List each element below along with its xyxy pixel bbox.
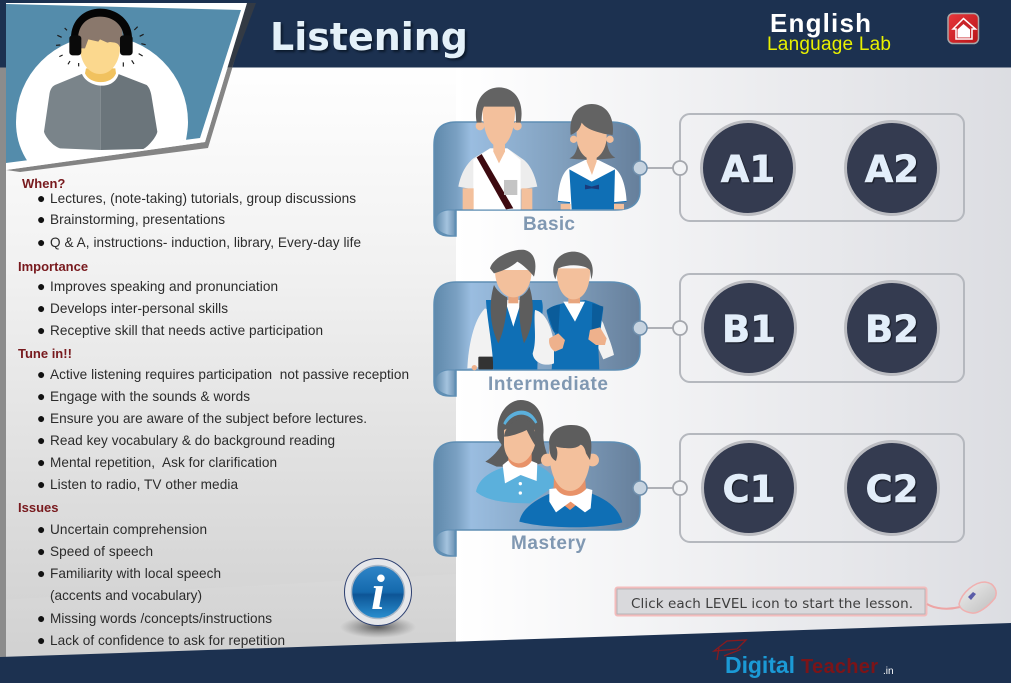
- Tune in section: Ensure you are aware of the subject before lectures.: [50, 411, 367, 426]
- connector node right: [673, 321, 687, 335]
- When section: Lectures, (note-taking) tutorials, group discussions: [50, 191, 356, 206]
- panel: Intermediate level: [434, 250, 964, 396]
- Tune in section: ●: [37, 454, 45, 470]
- Tune in section: ●: [37, 410, 45, 426]
- Tune in section: Mental repetition, Ask for clarification: [50, 455, 277, 470]
- Issues section: (accents and vocabulary): [50, 588, 202, 603]
- Tune in section: ●: [37, 476, 45, 492]
- title: Listening: [270, 15, 468, 59]
- Importance section: Improves speaking and pronunciation: [50, 279, 278, 294]
- icon: graduation cap: [714, 640, 746, 660]
- left edge strip: [0, 0, 6, 660]
- button: C2: [846, 442, 938, 534]
- When section: Q & A, instructions- induction, library, Every-day life: [50, 235, 361, 250]
- button: B1: B1: [722, 308, 776, 351]
- Issues section: Uncertain comprehension: [50, 522, 207, 537]
- label: Intermediate: Intermediate: [488, 374, 608, 395]
- figure: girl student: [558, 104, 627, 209]
- connector node right: [673, 481, 687, 495]
- options box: [680, 114, 964, 221]
- connector node right: [673, 161, 687, 175]
- button: B2: [846, 282, 938, 374]
- Issues section: Familiarity with local speech: [50, 566, 221, 581]
- figure: girl with vest: [467, 250, 543, 370]
- connector node left: [633, 321, 647, 335]
- When section: Brainstorming, presentations: [50, 212, 225, 227]
- icon: info button: i: [371, 564, 385, 620]
- When section: ●: [37, 211, 45, 227]
- listener figure: [44, 9, 157, 150]
- connector node left: [633, 161, 647, 175]
- Importance section: ●: [37, 278, 45, 294]
- button: A2: [846, 122, 938, 214]
- Issues section: ●: [37, 632, 45, 648]
- When section: [22, 176, 361, 250]
- Tune in section: Read key vocabulary & do background reading: [50, 433, 335, 448]
- figure: woman: [476, 400, 558, 503]
- figure: man: [519, 425, 622, 527]
- icon: home button: [948, 14, 978, 44]
- button: C2: C2: [866, 468, 918, 511]
- button: C1: [702, 442, 796, 534]
- figure: boy student: [458, 87, 537, 209]
- icon: mouse with cable: [927, 582, 996, 613]
- photo panel: listener: [6, 3, 247, 170]
- Issues section: ●: [37, 521, 45, 537]
- button: C1: C1: [723, 468, 775, 511]
- heading: Tune in: Tune in!!: [18, 346, 72, 361]
- Importance section: Receptive skill that needs active participation: [50, 323, 323, 338]
- panel: Basic level: [434, 87, 964, 236]
- figure: boy with vest: [547, 252, 614, 369]
- white circle: [16, 36, 188, 162]
- right area background: [456, 60, 1011, 660]
- footer bar: [0, 623, 1011, 683]
- Importance section: Develops inter-personal skills: [50, 301, 228, 316]
- brand: English Language Lab: English: [770, 8, 871, 38]
- options box: [680, 434, 964, 542]
- Issues section: Missing words /concepts/instructions: [50, 611, 272, 626]
- Importance section: [18, 259, 323, 338]
- Tune in section: Active listening requires participation not passive reception: [50, 367, 409, 382]
- button: A1: A1: [721, 148, 775, 191]
- banner: [434, 282, 640, 396]
- Tune in section: [18, 346, 409, 492]
- logo: Digital Teacher: [714, 640, 894, 678]
- banner curl: [435, 370, 455, 396]
- header bar: [0, 0, 1011, 68]
- Issues section: ●: [37, 610, 45, 626]
- left panel diagonal sheen: [0, 574, 456, 660]
- Issues section: ●: [37, 543, 45, 559]
- Tune in section: ●: [37, 432, 45, 448]
- callout: click instruction: Click each LEVEL icon to start the lesson.: [631, 596, 913, 612]
- Tune in section: ●: [37, 388, 45, 404]
- figure: girl's sleeve and hand: [533, 310, 565, 365]
- button: B1: [702, 282, 796, 374]
- dark shadow over header: [227, 3, 256, 67]
- logo: Digital Teacher: .in: [883, 666, 894, 677]
- callout: click instruction: [616, 588, 926, 616]
- panel: Mastery level: [434, 400, 964, 556]
- button: A1: [702, 122, 794, 214]
- banner curl: [435, 210, 455, 236]
- banner: [434, 442, 640, 556]
- Importance section: ●: [37, 300, 45, 316]
- Issues section: Lack of confidence to ask for repetition: [50, 633, 285, 648]
- label: Mastery: Mastery: [511, 533, 586, 554]
- icon: info button: [340, 558, 416, 638]
- logo: Digital Teacher: Teacher: [801, 656, 878, 678]
- options box: [680, 274, 964, 382]
- heading: When: When?: [22, 176, 65, 191]
- button: A2: A2: [865, 148, 919, 191]
- heading: Issues: Issues: [18, 500, 58, 515]
- Issues section: Speed of speech: [50, 544, 153, 559]
- When section: ●: [37, 234, 45, 250]
- connector: [647, 167, 673, 169]
- logo: Digital Teacher: Digital: [725, 652, 795, 678]
- heading: Importance: Importance: [18, 259, 88, 274]
- banner curl: [435, 530, 455, 556]
- Issues section: ●: [37, 565, 45, 581]
- connector node left: [633, 481, 647, 495]
- left text panel background: [0, 60, 456, 660]
- Tune in section: Engage with the sounds & words: [50, 389, 250, 404]
- shadow of photo panel: [6, 3, 252, 172]
- Issues section: [18, 500, 285, 648]
- When section: ●: [37, 190, 45, 206]
- brand: English Language Lab: Language Lab: [767, 34, 891, 55]
- brand: English Language Lab: [767, 8, 891, 55]
- label: Basic: Basic: [523, 214, 575, 235]
- Tune in section: ●: [37, 366, 45, 382]
- connector: [647, 327, 673, 329]
- Importance section: ●: [37, 322, 45, 338]
- button: B2: B2: [865, 308, 919, 351]
- banner: [434, 122, 640, 236]
- connector: [647, 487, 673, 489]
- Tune in section: Listen to radio, TV other media: [50, 477, 238, 492]
